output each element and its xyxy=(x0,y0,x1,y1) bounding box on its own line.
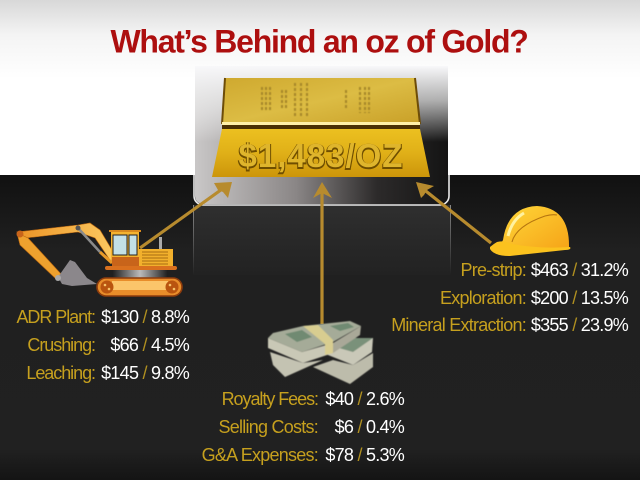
row: Selling Costs xyxy=(218,417,405,437)
row: Leaching xyxy=(26,363,190,383)
arrow: right to gold bar xyxy=(416,182,491,243)
centre column glow xyxy=(193,205,450,275)
row: Crushing: $66 / 4.5% xyxy=(110,335,190,355)
row: ADR Plant: ADR Plant: xyxy=(16,307,95,327)
row: ADR Plant: $130 / 8.8% xyxy=(101,307,190,327)
background: top white band xyxy=(0,0,640,175)
text block: left costs xyxy=(16,307,190,383)
row: Selling Costs: $6 / 0.4% xyxy=(335,417,405,437)
row: Mineral Extraction xyxy=(391,315,629,335)
row: Royalty Fees xyxy=(222,389,405,409)
row: G&A Expenses xyxy=(202,445,405,465)
text block: right costs xyxy=(391,260,629,335)
excavator engine xyxy=(139,249,173,267)
row: Exploration: $200 / 13.5% xyxy=(531,288,629,308)
excavator cab xyxy=(111,231,139,259)
gold bar price label: $1,483/OZ xyxy=(239,138,403,175)
row: Leaching: $145 / 9.8% xyxy=(101,363,190,383)
row: Royalty Fees: $40 / 2.6% xyxy=(325,389,405,409)
background: dark lower panel xyxy=(0,175,640,480)
title: What’s Behind an oz of Gold? xyxy=(110,24,528,60)
row: G&A Expenses: G&A Expenses: xyxy=(202,445,318,465)
row: Pre-strip xyxy=(460,260,629,280)
row: Crushing: Crushing: xyxy=(27,335,95,355)
row: Leaching: Leaching: xyxy=(26,363,95,383)
row: Mineral Extraction: $355 / 23.9% xyxy=(531,315,629,335)
excavator track xyxy=(97,278,182,296)
excavator bucket xyxy=(58,260,97,286)
row: Selling Costs: Selling Costs: xyxy=(218,417,318,437)
row: G&A Expenses: $78 / 5.3% xyxy=(325,445,405,465)
row: ADR Plant xyxy=(16,307,190,327)
arrow: centre to gold bar xyxy=(313,182,332,324)
row: Crushing xyxy=(27,335,190,355)
gold bar price label: $1,483/OZ xyxy=(239,137,403,174)
row: Pre-strip: $463 / 31.2% xyxy=(531,260,629,280)
icon: money stacks xyxy=(268,321,373,384)
arrow: left to gold bar xyxy=(140,182,232,248)
row: Royalty Fees: Royalty Fees: xyxy=(222,389,318,409)
row: Pre-strip: Pre-strip: xyxy=(460,260,526,280)
text block: centre costs xyxy=(202,389,405,465)
icon: hard hat xyxy=(490,206,570,256)
row: Exploration: Exploration: xyxy=(440,288,526,308)
icon: gold bar xyxy=(212,78,430,177)
panel: gold bar frame xyxy=(194,66,449,205)
row: Exploration xyxy=(440,288,629,308)
row: Mineral Extraction: Mineral Extraction: xyxy=(391,315,526,335)
icon: excavator xyxy=(16,223,182,296)
